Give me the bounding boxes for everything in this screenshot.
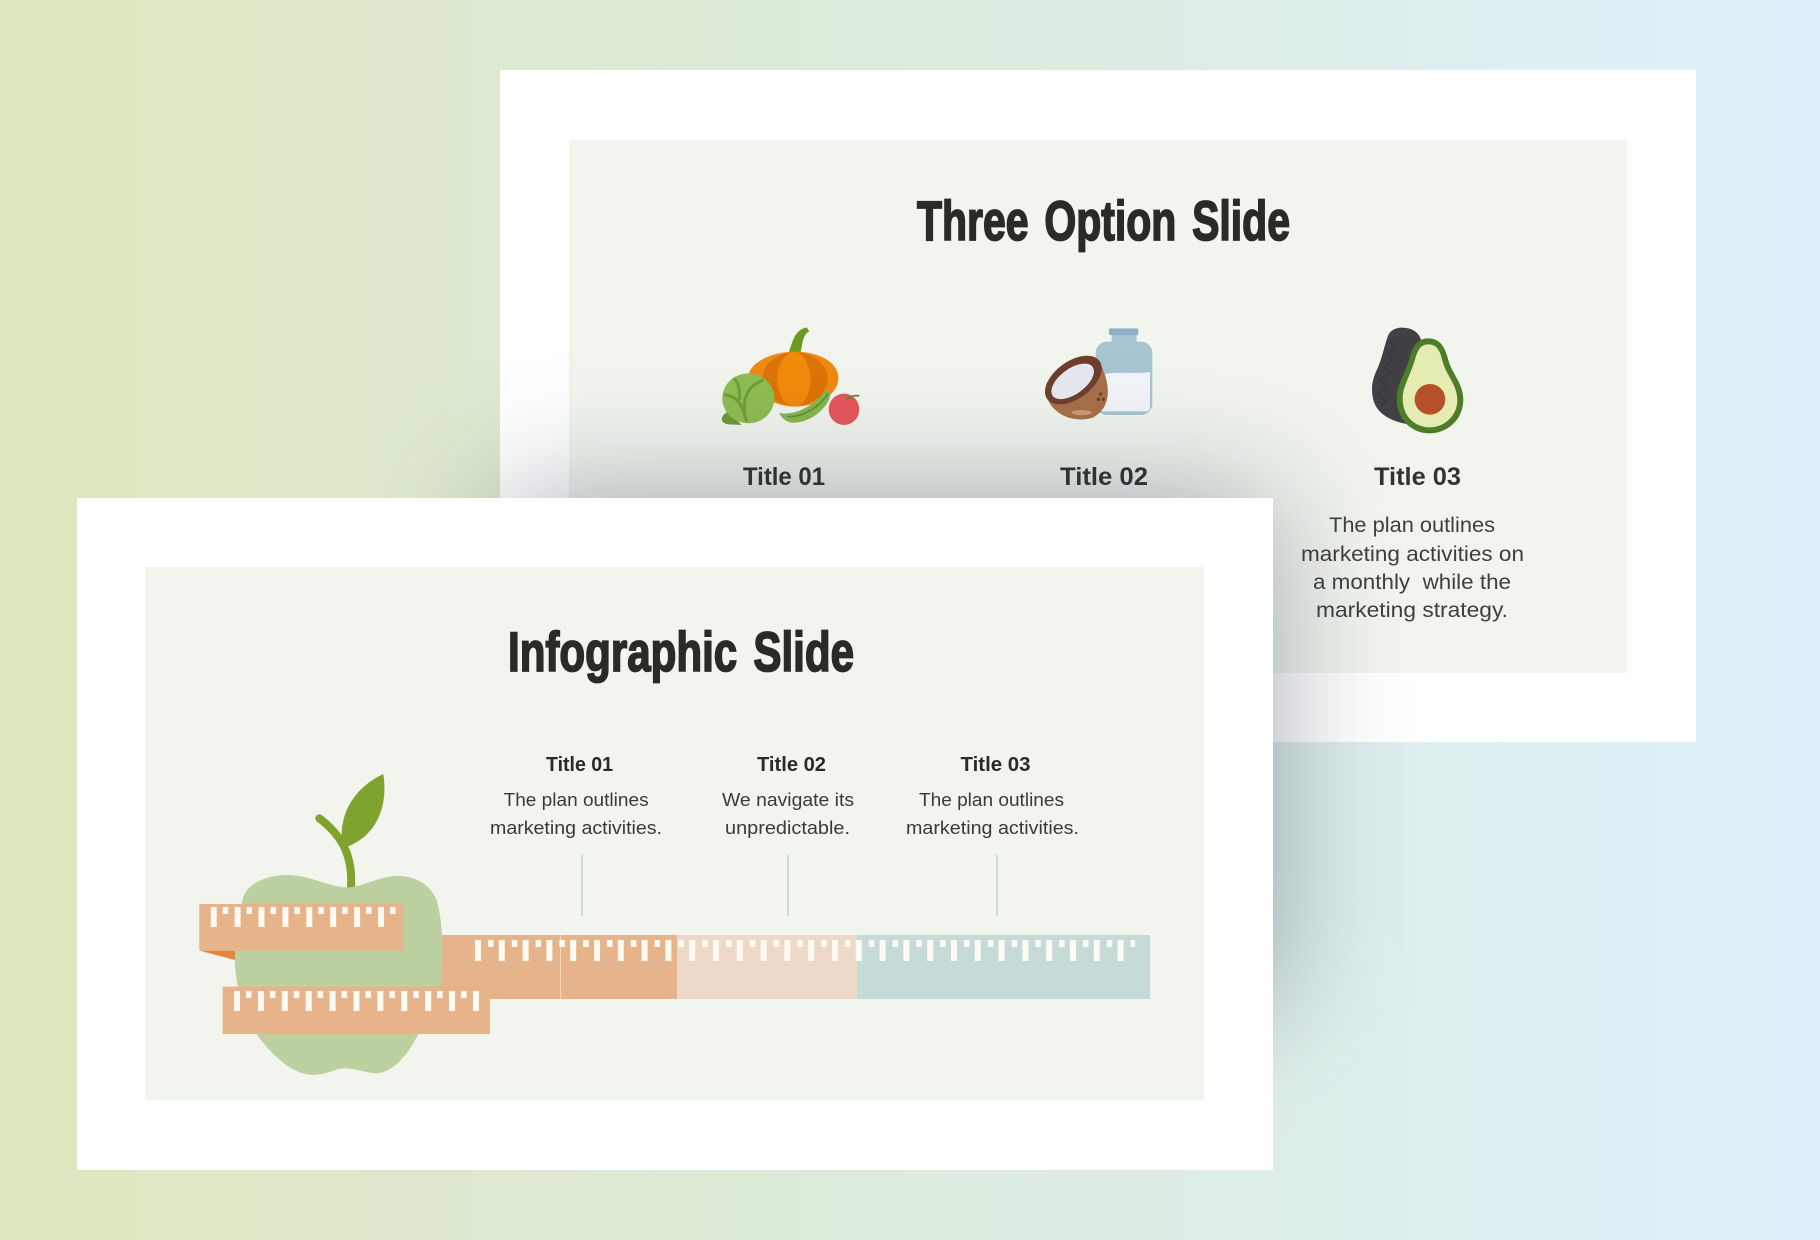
- connector line 3: [996, 855, 998, 916]
- icon: pumpkin and vegetables: [722, 327, 859, 425]
- heading: Three Option Slide: Three Option Slide: [917, 189, 1290, 252]
- front slide inner panel: [145, 567, 1204, 1100]
- front slide drop shadow: [500, 498, 1273, 1003]
- heading: Infographic Slide: Infographic Slide: [508, 620, 854, 683]
- option title 02: Title 02: [1060, 463, 1148, 491]
- lower strap ticks: [234, 991, 480, 1011]
- option 03 description: marketing activities on: [1301, 543, 1524, 566]
- panel: back slide, three options: [500, 70, 1696, 742]
- column 1 title and text: Title 01: [546, 753, 613, 776]
- option 03 description: a monthly while the: [1313, 571, 1511, 594]
- column 3 title and text: marketing activities.: [906, 817, 1079, 838]
- tape fold: [199, 951, 235, 960]
- icon: avocado: [1372, 328, 1463, 433]
- back slide inner panel: [569, 140, 1627, 673]
- column 3 title and text: The plan outlines: [919, 789, 1064, 810]
- panel: front slide, infographic: [77, 498, 1273, 1170]
- option 03 description: [1301, 514, 1524, 622]
- icon: coconut and milk bottle: [1036, 328, 1152, 419]
- column 1 title and text: The plan outlines: [504, 789, 649, 810]
- column 2 title and text: unpredictable.: [725, 817, 850, 838]
- apple leaf: [342, 774, 384, 847]
- column 2 title and text: Title 02: [757, 753, 826, 776]
- apple body: [235, 875, 443, 1075]
- option 03 description: marketing strategy.: [1316, 599, 1508, 622]
- option title 03: Title 03: [1374, 463, 1461, 491]
- column 2 title and text: We navigate its: [722, 789, 854, 810]
- column 1 title and text: marketing activities.: [490, 817, 662, 838]
- column 3 title and text: Title 03: [960, 753, 1030, 776]
- column 1 title and text: [490, 753, 662, 838]
- upper tape strap: [199, 904, 403, 951]
- apple stem: [319, 818, 351, 887]
- connector line 2: [787, 855, 789, 916]
- option 03 description: The plan outlines: [1329, 514, 1495, 537]
- lower tape strap: [223, 987, 490, 1034]
- connector line 1: [581, 855, 583, 916]
- measuring tape: long segmented band: [425, 935, 1150, 999]
- column 3 title and text: [906, 753, 1079, 838]
- option title 01: Title 01: [743, 463, 825, 491]
- column 2 title and text: [722, 753, 854, 838]
- illustration: apple with measuring tape: [199, 774, 490, 1075]
- upper strap ticks: [211, 907, 401, 927]
